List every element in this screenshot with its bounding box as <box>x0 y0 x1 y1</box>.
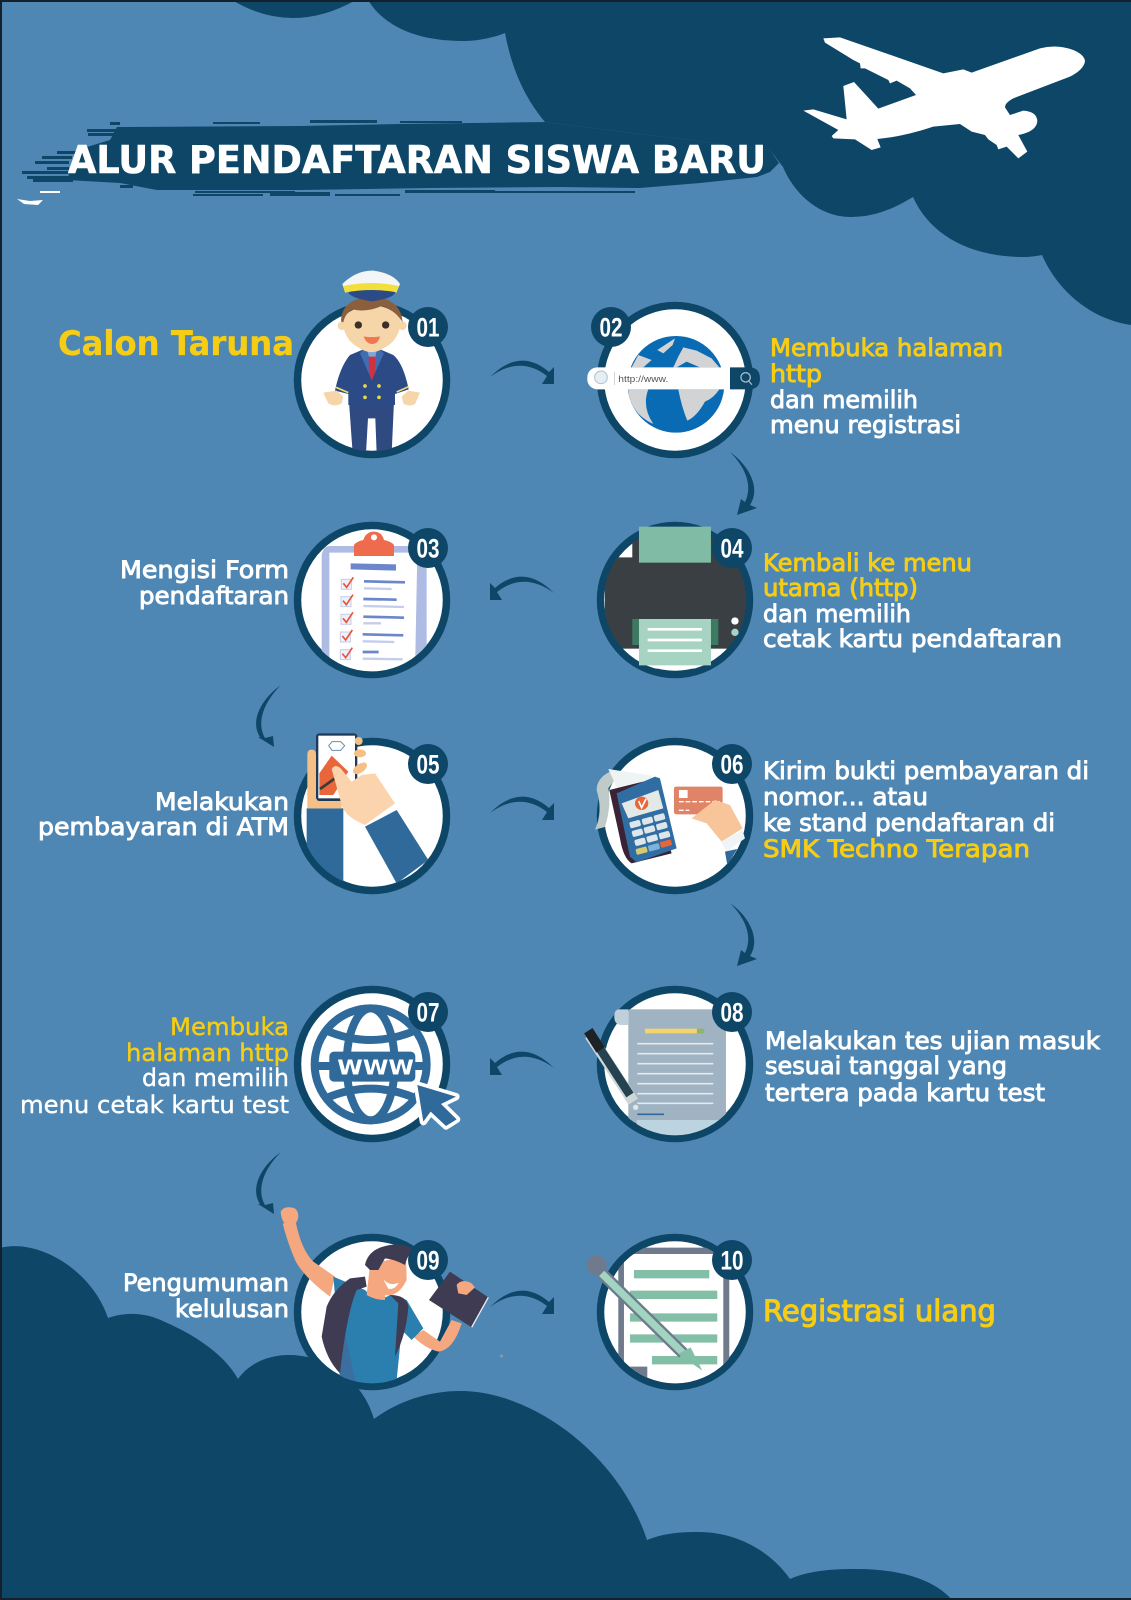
arrow 08 to 07 <box>490 1052 554 1075</box>
title: ALUR PENDAFTARAN SISWA BARU <box>68 138 766 182</box>
arrow 06 to 08 <box>730 903 757 966</box>
top right cloud <box>368 0 1131 325</box>
icon: cheering student <box>281 1207 488 1387</box>
text: kembali ke menu: Kembali ke menu <box>763 549 972 577</box>
text: cetak kartu test <box>20 1013 289 1119</box>
icon: hand tapping phone <box>307 733 428 885</box>
step 02: membuka halaman <box>587 306 1003 454</box>
badge 05: 05 <box>416 750 440 780</box>
text: kirim bukti: ke stand pendaftaran di <box>763 809 1055 837</box>
text: cetak kartu test: dan memilih <box>142 1064 289 1092</box>
badge 03 <box>408 528 448 568</box>
text: cetak kartu test: halaman http <box>126 1039 289 1067</box>
circle 10 <box>600 1238 750 1386</box>
circle 01 <box>298 306 446 454</box>
text: kembali ke menu: utama (http) <box>763 574 918 602</box>
badge 04 <box>712 528 752 568</box>
badge 10: 10 <box>720 1246 744 1276</box>
step 06: kirim bukti <box>595 742 1089 890</box>
badge 05 <box>408 744 448 784</box>
badge 04: 04 <box>720 534 744 564</box>
text: mengisi form <box>120 556 289 610</box>
circle 06 <box>600 742 750 890</box>
icon: www globe and cursor <box>313 1008 457 1126</box>
circle 03 <box>298 526 446 674</box>
text: pengumuman <box>123 1269 289 1323</box>
badge 08: 08 <box>720 998 744 1028</box>
step 03: mengisi form <box>120 526 448 674</box>
step 04: kembali ke menu <box>600 526 1062 674</box>
text: kirim bukti: SMK Techno Terapan <box>763 835 1030 863</box>
badge 06 <box>712 744 752 784</box>
text: registrasi ulang: Registrasi ulang <box>763 1294 996 1328</box>
badge 01: 01 <box>416 312 440 342</box>
text: melakukan pembayaran: Melakukan <box>155 788 289 816</box>
small speck <box>500 1354 503 1358</box>
circle 05 <box>298 742 446 890</box>
step 05: pembayaran atm <box>38 733 448 890</box>
badge 02: 02 <box>600 312 622 342</box>
badge 01 <box>408 307 448 347</box>
icon: printer <box>605 527 747 669</box>
step 01: calon taruna <box>58 271 448 454</box>
arrow 07 to 09 <box>256 1152 281 1214</box>
badge 08 <box>712 992 752 1032</box>
arrow 02 to 04 <box>730 452 757 515</box>
text: kirim bukti: nomor... atau <box>763 783 928 811</box>
icon: document and pencil <box>587 1248 729 1387</box>
text: membuka halaman: dan memilih <box>770 386 918 414</box>
text: kirim bukti: Kirim bukti pembayaran di <box>763 757 1089 785</box>
step 09: pengumuman <box>123 1207 488 1387</box>
badge 09 <box>408 1240 448 1280</box>
arrow 09 to 10 <box>490 1291 554 1314</box>
step 10: registrasi ulang <box>587 1238 996 1387</box>
badge 06: 06 <box>720 750 744 780</box>
text: mengisi form: Mengisi Form <box>120 556 289 584</box>
text: kirim bukti <box>763 757 1089 863</box>
text: kembali ke menu <box>763 549 1062 653</box>
text: membuka halaman: Membuka halaman <box>770 334 1003 362</box>
icon: test paper and pen <box>588 1009 730 1137</box>
text: cetak kartu test: menu cetak kartu test <box>20 1091 289 1119</box>
text: pengumuman: kelulusan <box>175 1295 289 1323</box>
text: membuka halaman <box>770 334 1003 439</box>
arrow 04 to 03 <box>490 577 554 600</box>
text: tes ujian: Melakukan tes ujian masuk <box>765 1027 1100 1055</box>
bottom cloud <box>0 1246 952 1600</box>
badge 10 <box>712 1240 752 1280</box>
icon: clipboard checklist <box>322 532 427 673</box>
text: mengisi form: pendaftaran <box>139 582 289 610</box>
icon: globe and search bar <box>587 336 760 433</box>
circle 07 <box>298 990 446 1138</box>
text: melakukan pembayaran <box>38 788 289 841</box>
badge 02 <box>591 307 631 347</box>
circle 09 <box>298 1238 446 1386</box>
text: kembali ke menu: dan memilih <box>763 600 911 628</box>
text: kembali ke menu: cetak kartu pendaftaran <box>763 625 1062 653</box>
icon: cadet <box>323 271 420 453</box>
badge 09: 09 <box>416 1246 440 1276</box>
badge 03: 03 <box>416 534 440 564</box>
step 08: tes ujian <box>588 990 1100 1138</box>
arrow 01 to 02 <box>490 361 554 384</box>
top small cloud <box>232 0 356 18</box>
text: membuka halaman: http <box>770 360 822 388</box>
badge 07 <box>408 992 448 1032</box>
text: calon taruna: Calon Taruna <box>58 324 294 364</box>
text: tes ujian: sesuai tanggal yang <box>765 1052 1007 1080</box>
arrow 03 to 05 <box>256 685 281 747</box>
text: tes ujian <box>765 1027 1100 1107</box>
icon: www globe and cursor: WWW <box>337 1056 414 1080</box>
text: melakukan pembayaran: pembayaran di ATM <box>38 813 289 841</box>
badge 07: 07 <box>416 998 440 1028</box>
title brush stroke <box>22 120 779 196</box>
text: tes ujian: tertera pada kartu test <box>765 1079 1045 1107</box>
brush white specks <box>17 191 60 205</box>
airplane silhouette <box>803 37 1085 158</box>
text: pengumuman: Pengumuman <box>123 1269 289 1297</box>
text: membuka halaman: menu registrasi <box>770 411 961 439</box>
icon: payment terminal and card <box>595 769 745 865</box>
circle 08 <box>600 990 750 1138</box>
text: cetak kartu test: Membuka <box>170 1013 289 1041</box>
icon: globe and search bar: http://www. <box>618 374 668 384</box>
arrow 05 to 06 <box>490 797 554 820</box>
circle 02 <box>600 306 750 454</box>
circle 04 <box>600 526 750 674</box>
step 07: cetak kartu test <box>20 990 457 1138</box>
